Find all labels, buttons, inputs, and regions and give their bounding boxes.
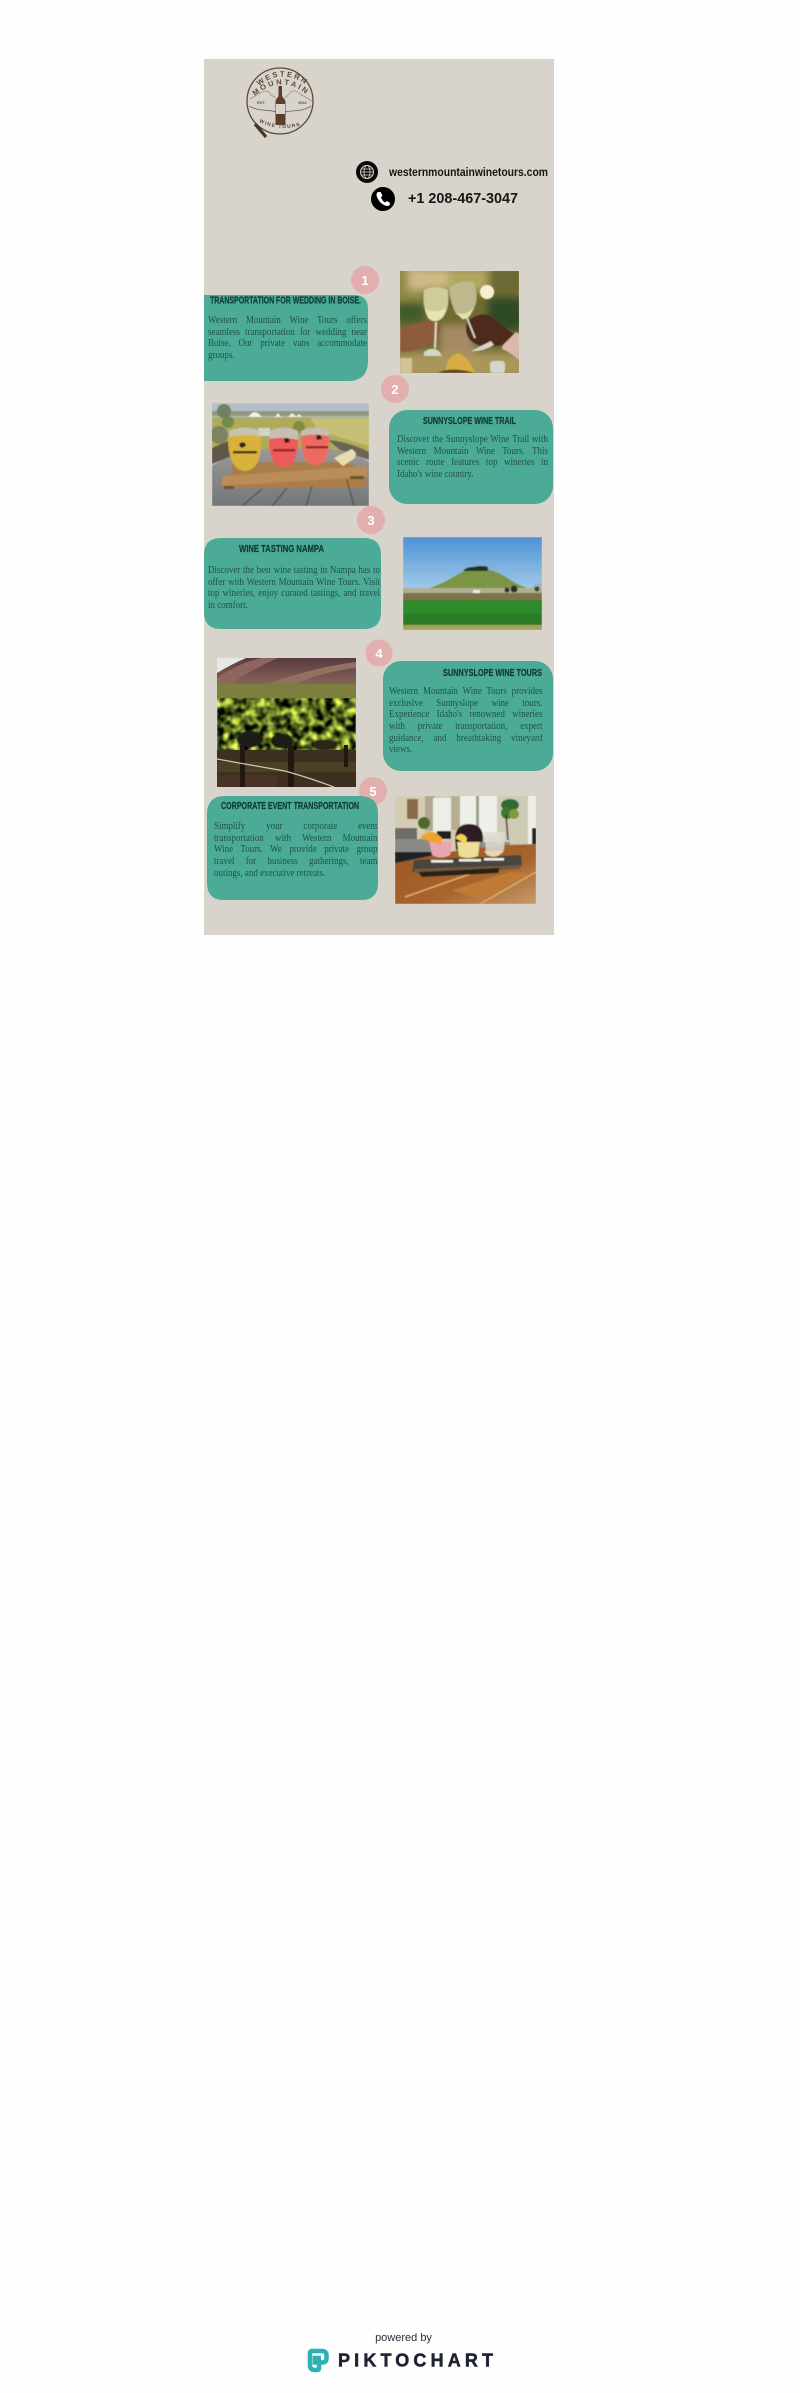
badge 3 <box>357 506 385 534</box>
powered by label: powered by <box>375 2332 432 2344</box>
badge 5: 5 <box>369 784 377 799</box>
body text <box>208 565 380 613</box>
panel: corporate event transportation <box>207 796 378 900</box>
icon: Piktochart mark <box>310 2351 326 2370</box>
footer: powered by Piktochart <box>310 2332 493 2370</box>
body text: views. <box>388 744 412 755</box>
body text: Simplify your corporate event <box>214 821 377 832</box>
badge 1: 1 <box>361 273 369 288</box>
body text: Experience Idaho's renowned wineries <box>388 709 542 720</box>
body text: Boise. Our private vans accommodate <box>208 338 366 349</box>
logo: Western Mountain Wine Tours: WESTERN <box>256 71 308 86</box>
logo: Western Mountain Wine Tours: 2024 <box>298 101 307 105</box>
badge 4: 4 <box>375 646 383 661</box>
body text: seamless transportation for wedding near <box>208 327 366 338</box>
body text: travel for business gatherings, team <box>214 856 377 867</box>
badge 2: 2 <box>391 382 399 397</box>
heading: CORPORATE EVENT TRANSPORTATION <box>221 800 359 812</box>
badge 3: 3 <box>367 513 375 528</box>
panel: sunnyslope wine trail <box>389 410 553 504</box>
panel: wine tasting nampa <box>204 538 381 629</box>
website contact <box>356 161 548 183</box>
badge 2 <box>381 375 409 403</box>
body text: scenic route features top wineries in <box>397 457 548 468</box>
panel: sunnyslope wine tours <box>383 661 553 771</box>
website address: westernmountainwinetours.com <box>388 167 548 179</box>
Piktochart wordmark: PIKTOCHART <box>338 2350 493 2370</box>
photo: wine flight on wooden table <box>395 796 536 904</box>
phone number: +1 208-467-3047 <box>408 190 518 207</box>
logo: Western Mountain Wine Tours <box>246 67 314 138</box>
body text: with private transportation, expert <box>388 721 542 732</box>
logo: Western Mountain Wine Tours: MOUNTAIN <box>252 79 308 96</box>
body text: in comfort. <box>208 600 247 611</box>
badge 4 <box>366 640 392 666</box>
heading: SUNNYSLOPE WINE TRAIL <box>423 415 516 427</box>
photo: clinking wine glasses <box>400 271 519 373</box>
body text: Idaho's wine country. <box>397 469 473 480</box>
body text <box>208 315 366 363</box>
body text <box>388 686 542 758</box>
photo: wine flight on barrel <box>210 403 369 506</box>
body text: Western Mountain Wine Tours provides <box>388 686 542 697</box>
heading: TRANSPORTATION FOR WEDDING IN BOISE. <box>210 294 361 306</box>
body text <box>214 821 378 881</box>
body text: Western Mountain Wine Tours offers <box>208 315 366 326</box>
body text: Wine Tours. We provide private group <box>214 844 377 855</box>
heading: SUNNYSLOPE WINE TOURS <box>443 667 542 679</box>
body text: top wineries, enjoy curated tastings, and travel <box>208 588 379 599</box>
body text: guidance, and breathtaking vineyard <box>388 733 542 744</box>
body text: Western Mountain Wine Tours. This <box>397 446 548 457</box>
body text <box>397 434 548 482</box>
body text: Discover the best wine tasting in Nampa has to <box>208 565 379 576</box>
phone contact <box>371 187 518 211</box>
body text: Discover the Sunnyslope Wine Trail with <box>397 434 548 445</box>
badge 1 <box>351 266 379 294</box>
logo: Western Mountain Wine Tours: WINE TOURS <box>260 118 300 128</box>
body text: exclusive Sunnyslope wine tours. <box>388 698 542 709</box>
body text: groups. <box>208 350 234 361</box>
badge 5 <box>359 777 387 805</box>
photo: vineyard below mountains <box>217 658 356 787</box>
heading: WINE TASTING NAMPA <box>239 543 324 555</box>
logo: Western Mountain Wine Tours: EST. <box>257 101 265 105</box>
photo: hill above green field <box>403 537 542 630</box>
panel: infographic background <box>204 59 554 935</box>
icon: phone <box>371 187 395 211</box>
icon: globe <box>356 161 378 183</box>
panel: transportation for wedding <box>204 294 368 381</box>
body text: offer with Western Mountain Wine Tours. Visit <box>208 577 379 588</box>
body text: outings, and executive retreats. <box>214 868 325 879</box>
body text: transportation with Western Mountain <box>214 833 377 844</box>
